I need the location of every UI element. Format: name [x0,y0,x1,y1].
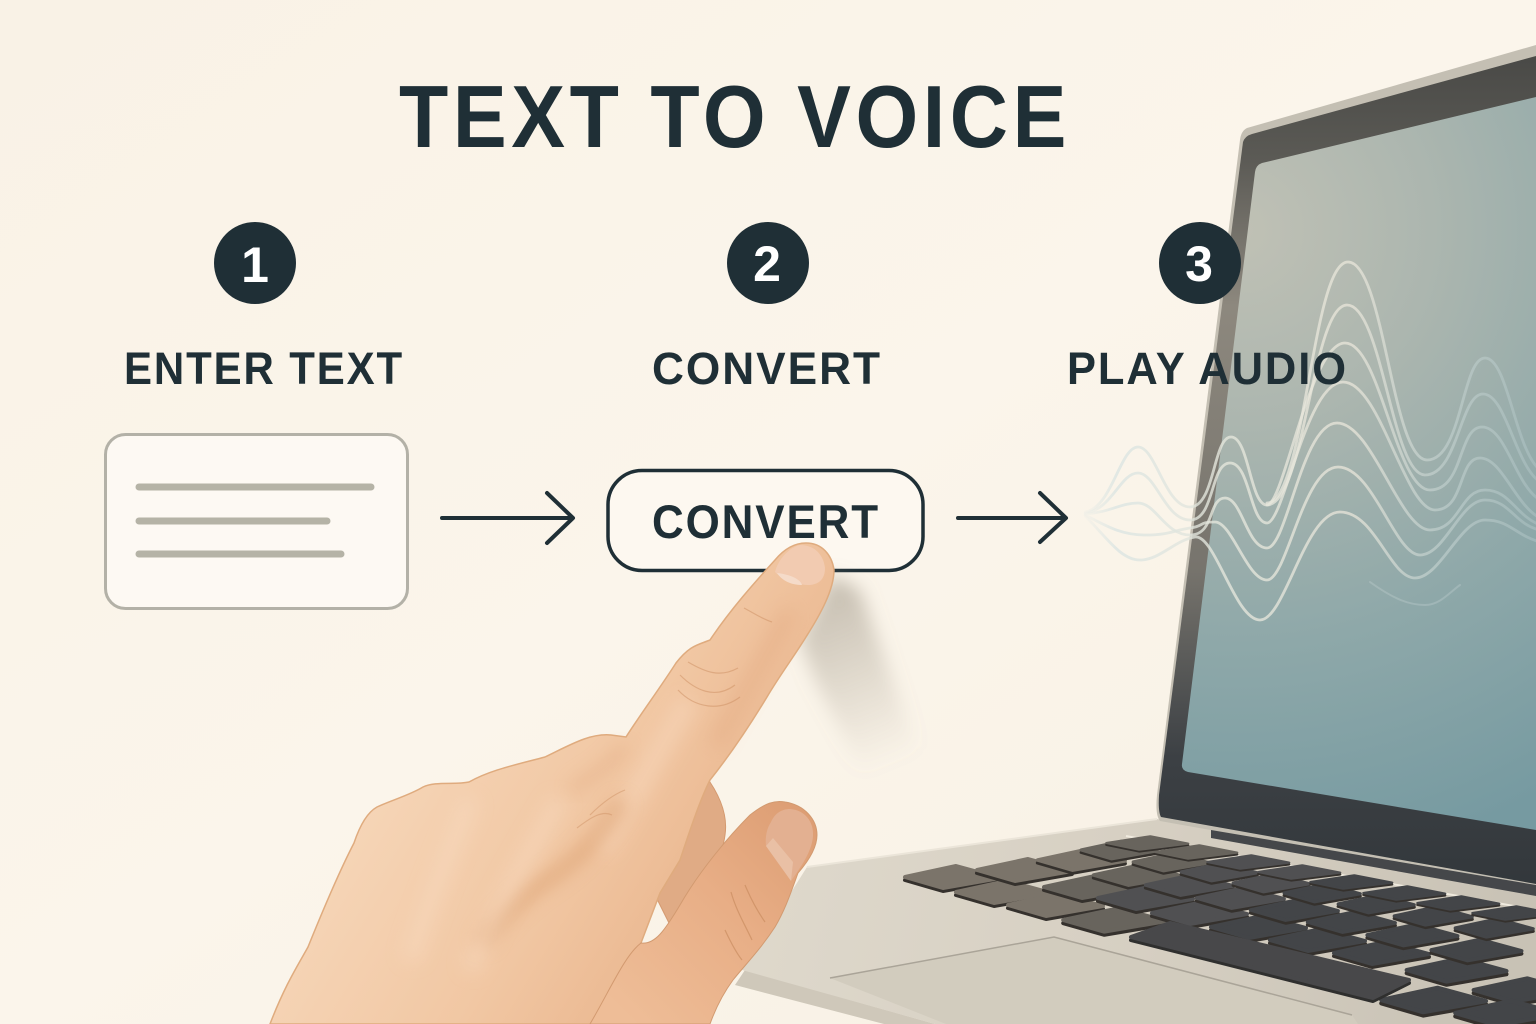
step 1 heading: ENTER TEXT [124,343,404,394]
step 3 heading: PLAY AUDIO [1067,343,1348,394]
finger shadow [800,575,925,790]
index fingernail [775,545,825,585]
sound wave [1085,262,1536,620]
index knuckle creases [678,608,772,706]
step 3 [1067,222,1348,394]
step 2 badge: 2 [753,236,781,292]
convert button [608,470,923,570]
step 1 [106,222,408,608]
curled finger behind [655,775,726,925]
convert button: CONVERT [652,495,880,548]
step 2 heading: CONVERT [652,343,882,394]
title: TEXT TO VOICE [399,67,1071,166]
laptop lid [1156,45,1536,896]
index finger and back of hand [270,543,834,1024]
hand [270,543,834,1024]
arrow: enter text to convert [442,493,573,543]
laptop [735,45,1536,1024]
trackpad [830,937,1358,1024]
laptop screen [1182,97,1536,830]
thumb nail [766,809,813,881]
keyboard [905,836,1536,1024]
laptop base [735,819,1536,1024]
step 1 badge [214,222,296,304]
thumb creases [725,885,765,960]
thumb [590,801,817,1024]
step 1 badge: 1 [241,237,269,293]
text input card [106,434,408,608]
lower knuckle creases [577,790,625,828]
arrow: convert to play audio [958,493,1066,542]
step 2 badge [727,222,809,304]
step 3 badge: 3 [1185,236,1213,292]
step 3 badge [1159,222,1241,304]
step 2 [608,222,923,570]
